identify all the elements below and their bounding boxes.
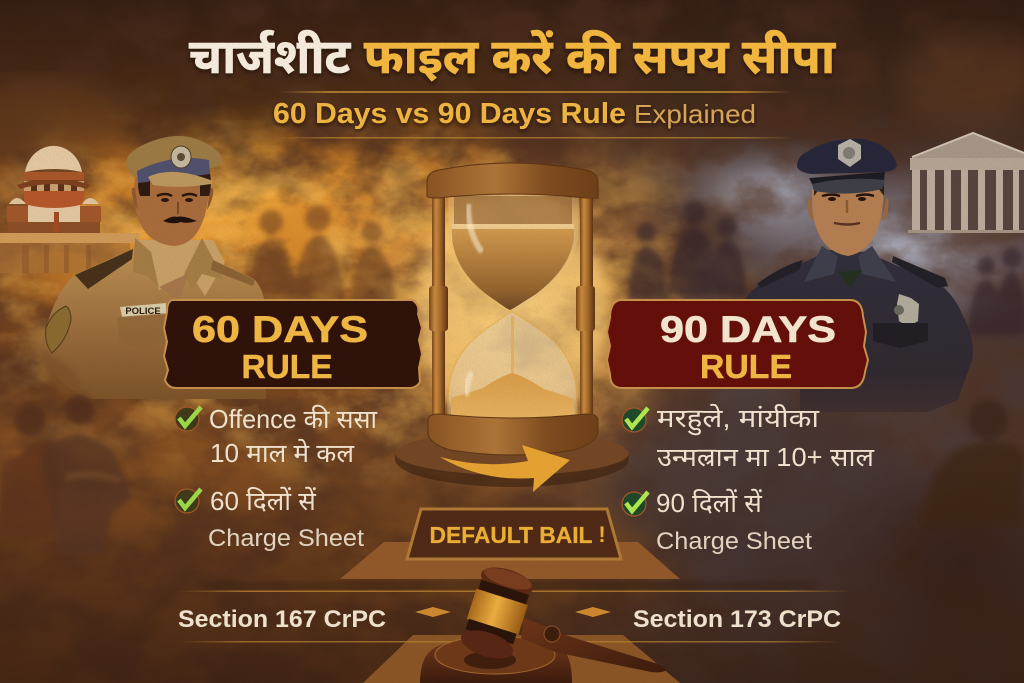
left list: Charge Sheet bbox=[208, 525, 364, 552]
section band bbox=[178, 581, 850, 642]
right list: 90 दिलों सें bbox=[656, 488, 762, 518]
name tag: POLICE bbox=[125, 306, 161, 317]
right list: उन्मल्रान मा 10+ साल bbox=[657, 442, 874, 472]
check icon bbox=[175, 489, 201, 513]
left list: 60 दिलों सें bbox=[210, 486, 316, 516]
badge: 90 days rule: RULE bbox=[700, 348, 792, 385]
right list: Charge Sheet bbox=[656, 528, 812, 555]
silhouettes: crowd right bbox=[628, 201, 1024, 335]
officer: left (khaki uniform) bbox=[40, 136, 266, 402]
name tag bbox=[120, 303, 166, 317]
left list bbox=[175, 404, 378, 552]
left list: Offence की ससा bbox=[209, 404, 378, 434]
badge: 90 days rule bbox=[607, 300, 868, 388]
hourglass base bbox=[428, 414, 598, 455]
glass upper bbox=[449, 192, 578, 313]
badge: 60 days rule bbox=[164, 300, 422, 388]
default bail sign: ! bbox=[598, 522, 606, 547]
title: चार्जशीट फाइल करें की सपय सीपा bbox=[189, 29, 836, 84]
title divider lower bbox=[278, 137, 792, 138]
check icon bbox=[175, 407, 201, 431]
hourglass posts bbox=[429, 195, 595, 423]
subtitle: 60 Days vs 90 Days Rule bbox=[273, 98, 626, 130]
hourglass top cap bbox=[427, 163, 598, 198]
subtitle: Explained bbox=[634, 99, 756, 129]
sand lower bbox=[451, 373, 575, 428]
right list bbox=[622, 403, 874, 555]
gavel bbox=[420, 562, 665, 683]
silhouettes: people lower-left bbox=[0, 395, 132, 554]
building: classical courthouse bbox=[908, 133, 1024, 233]
default bail sign bbox=[407, 509, 621, 559]
badge: 60 days rule: RULE bbox=[242, 348, 332, 385]
hourglass plate bbox=[395, 431, 629, 477]
building: supreme court dome bbox=[0, 146, 140, 273]
badge: 60 days rule: 60 DAYS bbox=[192, 309, 368, 350]
section 173 label: Section 173 CrPC bbox=[633, 606, 841, 633]
glass lower bbox=[448, 312, 577, 424]
title divider upper bbox=[278, 91, 792, 93]
silhouettes: crowd left bbox=[248, 205, 396, 330]
officer: right (dark uniform) bbox=[746, 139, 973, 412]
hourglass bbox=[395, 163, 629, 492]
platform bbox=[340, 542, 680, 683]
gavel handle bbox=[521, 618, 665, 672]
gavel block bbox=[420, 636, 572, 683]
check icon bbox=[622, 408, 648, 432]
gavel head bbox=[458, 562, 536, 664]
section 167 label: Section 167 CrPC bbox=[178, 606, 386, 633]
right list: मरहुले, मांयीका bbox=[657, 403, 820, 436]
left list: 10 माल मे कल bbox=[210, 438, 354, 468]
silhouettes: person lower-right bbox=[922, 400, 1024, 525]
check icon bbox=[622, 492, 648, 516]
badge: 90 days rule: 90 DAYS bbox=[660, 309, 836, 350]
default bail sign: DEFAULT BAIL bbox=[430, 522, 592, 548]
sand upper bbox=[452, 228, 574, 310]
arrow bbox=[440, 445, 570, 492]
